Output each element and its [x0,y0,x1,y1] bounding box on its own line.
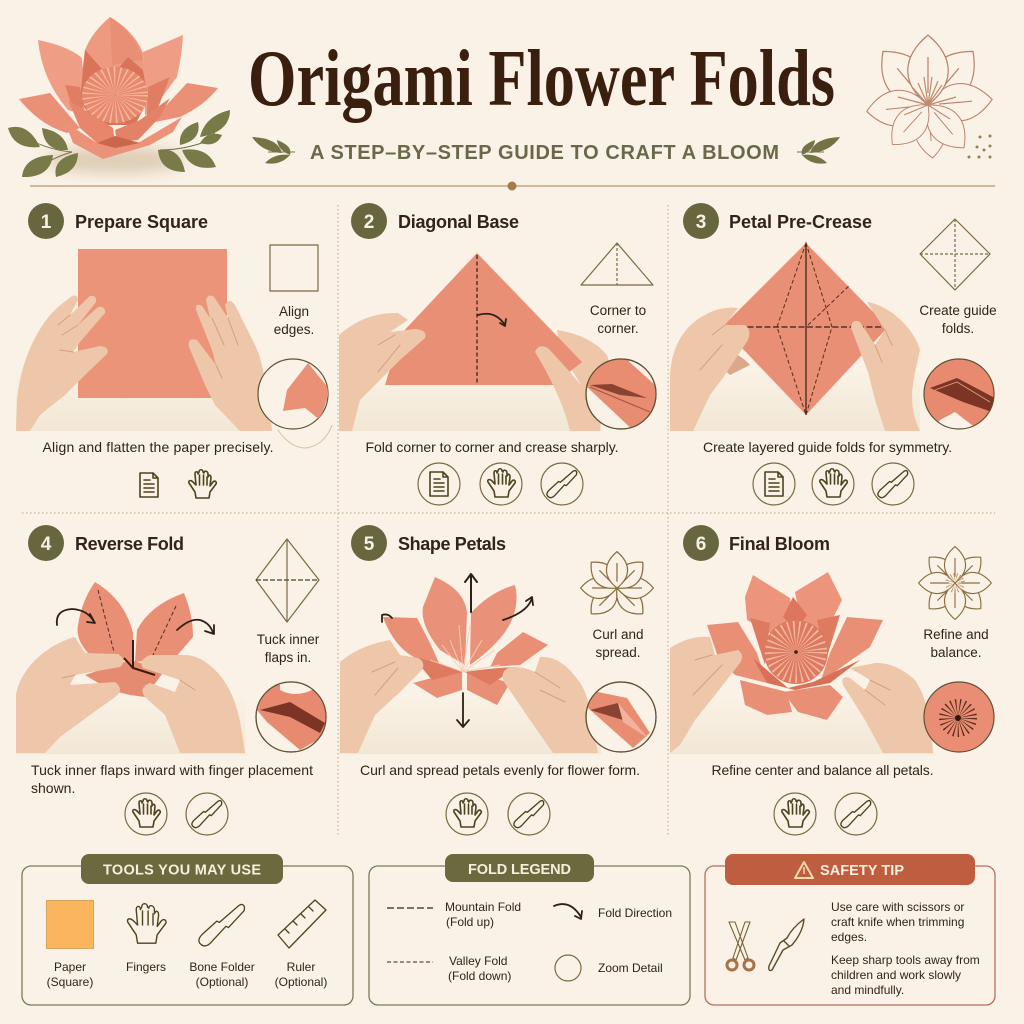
step 3 zoom detail [924,359,995,435]
step 1 number: 1 [41,212,52,233]
step 4 side note [257,632,320,665]
step 3 side note [919,303,997,336]
safety text: edges. [831,930,867,944]
header divider [30,182,995,190]
step 4 heading: Reverse Fold [75,534,184,554]
tool: ruler: (Optional) [275,975,327,989]
legend: fold direction: Fold Direction [598,906,672,920]
legend: fold direction [554,904,672,920]
step 6 photo [670,572,933,754]
legend heading: FOLD LEGEND [468,862,571,878]
step 4 photo [16,582,245,754]
step 6 heading: Final Bloom [729,534,830,554]
step 6 tool icons [774,793,877,835]
step 1 number [28,203,64,239]
step 3 caption: Create layered guide folds for symmetry. [703,439,952,455]
step 2 side note: corner. [597,321,639,336]
icon: craft knife [769,919,804,970]
step 1 caption: Align and flatten the paper precisely. [42,439,274,455]
step 5 heading: Shape Petals [398,534,506,554]
step 3 number [683,203,719,239]
step 5 number [351,525,387,561]
icon: right subtitle leaves [797,137,840,164]
step 6 number [683,525,719,561]
step 1 side note: edges. [274,322,314,337]
step 2 caption: Fold corner to corner and crease sharply. [366,439,618,455]
step 2 side note: Corner to [590,303,646,318]
step 4 tool icons [125,793,228,835]
step 1 outline square [270,245,318,291]
step 4 number [28,525,64,561]
header flower illustration [8,17,230,177]
step 2 side note [590,303,646,336]
safety text: and mindfully. [831,983,904,997]
tool: paper: Paper [54,960,86,974]
step 4 outline kite [256,539,319,622]
step 6 outline flower [919,547,991,619]
panel: step 6 [670,525,994,835]
panel: safety tip [705,854,995,1005]
step 4 number: 4 [41,534,52,555]
tools heading [81,854,283,884]
safety text: craft knife when trimming [831,915,964,929]
step 3 heading: Petal Pre-Crease [729,212,872,232]
panel: fold legend [369,854,690,1005]
step 5 number: 5 [364,534,375,555]
step 5 side note: Curl and [592,627,644,642]
step 3 side note: Create guide [919,303,997,318]
step 6 caption: Refine center and balance all petals. [712,762,934,778]
step 3 side note: folds. [942,321,974,336]
legend: mountain fold: (Fold up) [446,915,494,929]
step 1 side note: Align [279,304,309,319]
step 6 side note: balance. [930,645,982,660]
panel: step 2 [339,203,660,505]
step 5 side note: spread. [595,645,641,660]
panel: step 4 [16,525,330,835]
step 5 side note [592,627,644,660]
tool: paper: (Square) [47,975,93,989]
legend: zoom detail: Zoom Detail [598,961,663,975]
step 5 photo [339,574,601,754]
legend: mountain fold: Mountain Fold [445,900,521,914]
tool: ruler [275,900,327,989]
step 6 side note [923,627,989,660]
step 5 tool icons [446,793,550,835]
step 6 side note: Refine and [923,627,989,642]
safety text [831,900,980,997]
step 3 outline diamond [920,219,990,290]
icon: left subtitle leaves [252,137,295,164]
subtitle: A STEP–BY–STEP GUIDE TO CRAFT A BLOOM [310,142,780,164]
tool: bone folder: (Optional) [196,975,248,989]
step 1 zoom detail [258,359,332,448]
step 1 side note [274,304,314,337]
tool: fingers: Fingers [126,960,166,974]
panel: step 5 [339,525,656,835]
step 5 caption: Curl and spread petals evenly for flower form. [360,762,640,778]
legend: valley fold: Valley Fold [449,954,507,968]
step 4 side note: Tuck inner [257,632,320,647]
step 2 outline triangle [581,243,653,285]
icon: scissors [727,922,754,970]
panel: tools you may use [22,854,353,1005]
tool: paper [46,900,94,989]
step 5 zoom detail [586,682,656,752]
title: Origami Flower Folds [248,35,835,123]
tool: bone folder: Bone Folder [189,960,255,974]
step 4 side note: flaps in. [265,650,311,665]
safety text: children and work slowly [831,968,961,982]
tools heading: TOOLS YOU MAY USE [103,862,261,878]
step 6 number: 6 [696,534,706,555]
tool: bone folder [189,904,255,989]
step 2 zoom detail [585,358,660,432]
legend: valley fold [387,954,511,983]
legend: mountain fold [387,900,521,929]
icon: header flower outline [865,35,994,159]
legend heading [445,854,594,882]
step 6 zoom detail [924,682,994,752]
step 1 heading: Prepare Square [75,212,208,232]
step 4 caption [31,762,313,796]
step 3 photo [670,243,920,431]
step 2 number: 2 [364,212,374,233]
step 2 tool icons [418,463,583,505]
step 1 photo [16,249,272,431]
legend: valley fold: (Fold down) [448,969,511,983]
step 2 number [351,203,387,239]
safety text: Use care with scissors or [831,900,964,914]
step 4 zoom detail [256,680,330,752]
step 4 caption: shown. [31,780,75,796]
step 3 number: 3 [696,212,706,233]
safety text: Keep sharp tools away from [831,953,980,967]
panel: step 3 [670,203,997,505]
panel: step 1 [16,203,332,498]
step 5 outline flower [581,552,653,621]
safety heading [725,854,975,885]
tool: ruler: Ruler [287,960,315,974]
legend: zoom detail [555,955,663,981]
step 2 photo [339,253,620,431]
tool: fingers [126,904,166,974]
step 2 heading: Diagonal Base [398,212,519,232]
safety heading: SAFETY TIP [820,863,904,879]
step 3 tool icons [753,463,914,505]
step 1 tool icons [140,470,216,498]
step 4 caption: Tuck inner flaps inward with finger placement [31,762,313,778]
